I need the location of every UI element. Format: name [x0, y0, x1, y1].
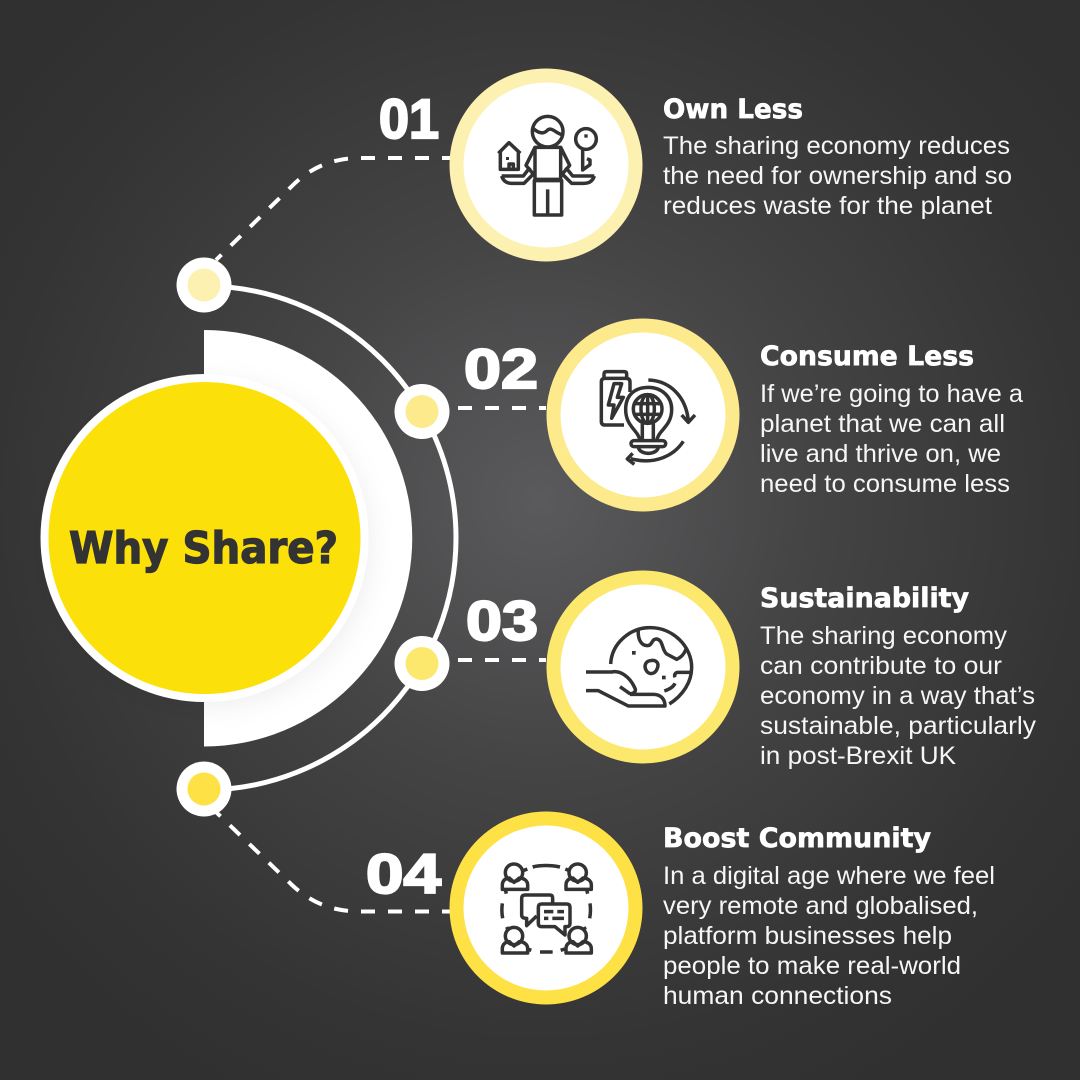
body: sustainable, particularly	[760, 712, 1037, 740]
body	[663, 862, 995, 1010]
body: people to make real-world	[663, 952, 961, 980]
text block: consume less	[760, 341, 1023, 498]
heading: Consume Less	[760, 341, 974, 372]
icon: hand holding globe	[586, 628, 692, 706]
body: need to consume less	[760, 470, 1010, 498]
body: economy in a way that’s	[760, 682, 1035, 710]
node 3	[394, 636, 450, 691]
number 04: 04	[366, 842, 441, 905]
white half disc	[204, 330, 412, 746]
heading: Sustainability	[760, 583, 969, 614]
body	[760, 380, 1023, 498]
badge 4: boost community	[450, 812, 642, 1004]
body: in post-Brexit UK	[760, 742, 956, 770]
connector: 02 dashed line	[458, 406, 546, 410]
title: Why Share?	[69, 523, 338, 574]
body: In a digital age where we feel	[663, 862, 995, 890]
icon: battery, bulb and globe	[601, 372, 695, 464]
outer thin arc	[204, 286, 456, 790]
icon: person with house and key	[498, 116, 596, 215]
body: the need for ownership and so	[663, 162, 1012, 190]
number 03: 03	[466, 589, 538, 652]
icon: community talking	[502, 864, 591, 953]
body: can contribute to our	[760, 652, 1002, 680]
body	[760, 622, 1037, 770]
body: If we’re going to have a	[760, 380, 1023, 408]
body: live and thrive on, we	[760, 440, 1001, 468]
body: human connections	[663, 982, 892, 1010]
body: very remote and globalised,	[663, 892, 978, 920]
body: platform businesses help	[663, 922, 952, 950]
text block: own less	[663, 94, 1012, 220]
body	[663, 132, 1012, 220]
node 1	[176, 258, 232, 312]
badge 3: sustainability	[546, 570, 740, 764]
badge 1: own less	[450, 68, 642, 262]
body: The sharing economy reduces	[663, 132, 1010, 160]
white ring with shadow	[40, 374, 368, 702]
badge 2: consume less	[546, 318, 740, 512]
heading: Boost Community	[663, 823, 931, 854]
body: The sharing economy	[760, 622, 1008, 650]
text block: boost community	[663, 823, 995, 1010]
node 2	[394, 384, 450, 439]
connector: 01 dashed line	[216, 158, 450, 260]
connector: 04 dashed line	[216, 812, 450, 912]
body: planet that we can all	[760, 410, 1005, 438]
text block: sustainability	[760, 583, 1037, 770]
central hub	[40, 330, 412, 746]
number 01: 01	[379, 87, 439, 150]
body: reduces waste for the planet	[663, 192, 992, 220]
number 02: 02	[464, 337, 538, 400]
heading: Own Less	[663, 94, 803, 125]
node 4	[176, 762, 232, 816]
yellow circle	[48, 382, 360, 694]
connector: 03 dashed line	[458, 658, 546, 662]
